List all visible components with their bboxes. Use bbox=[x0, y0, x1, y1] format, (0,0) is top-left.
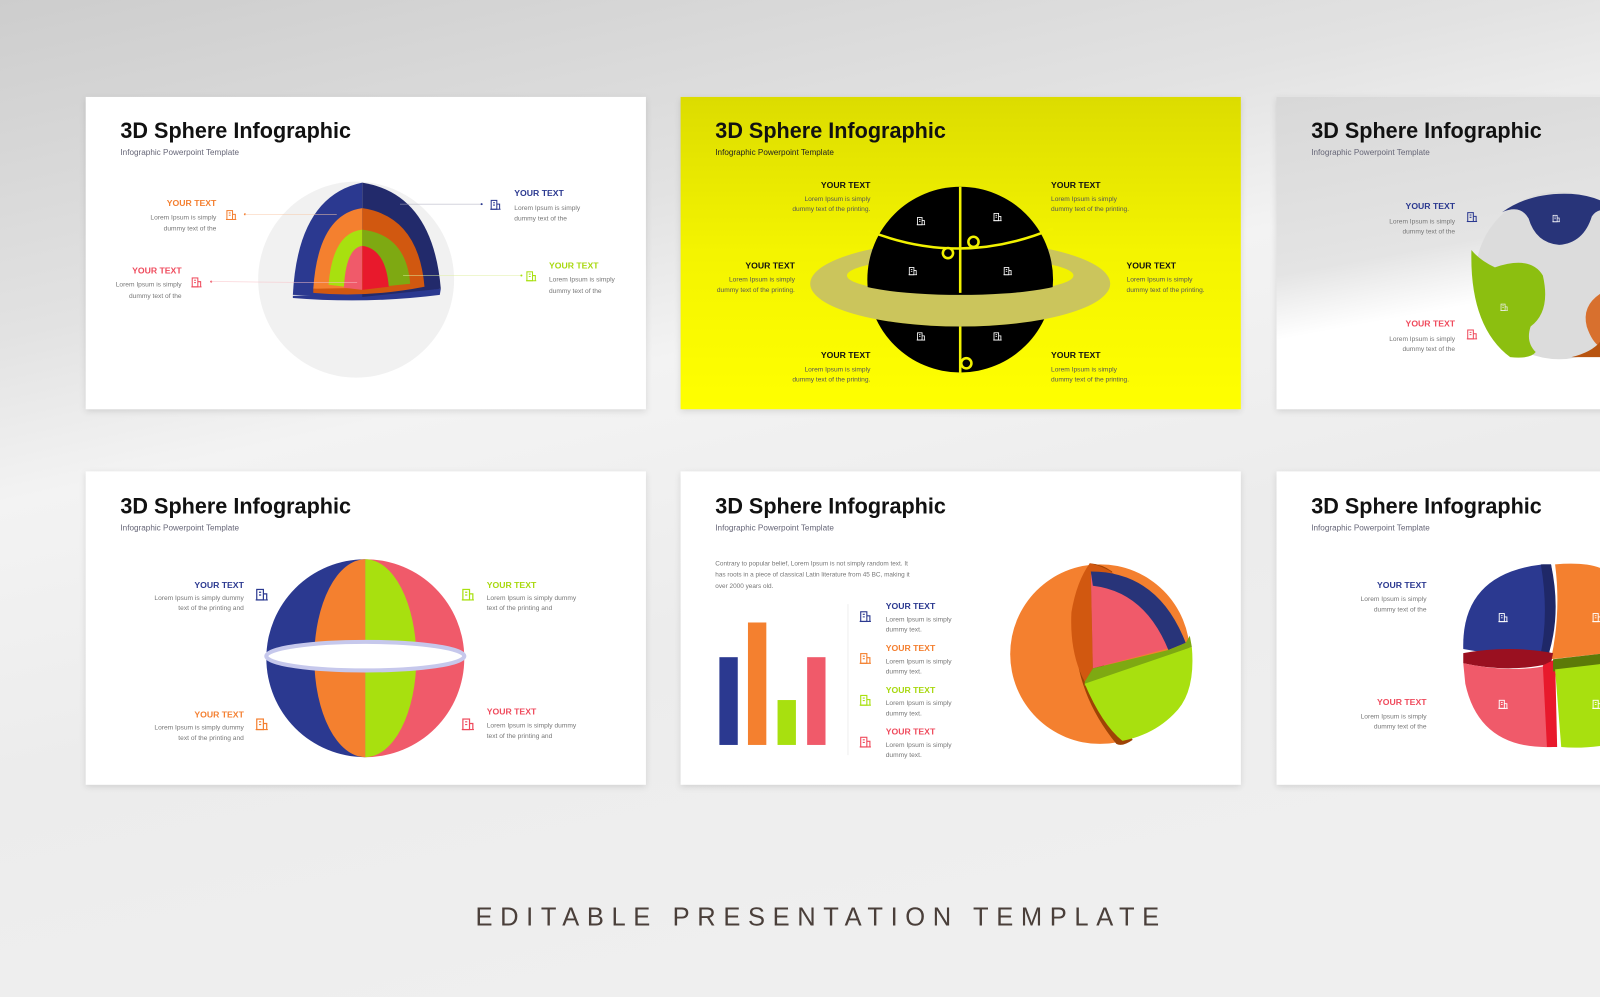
callout: blue bbox=[400, 188, 581, 222]
labels: left column: YOUR TEXT bbox=[745, 260, 796, 270]
callout: blue: text of the printing and bbox=[178, 605, 244, 612]
subtitle: Infographic Powerpoint Template bbox=[1311, 524, 1430, 533]
callout: orange: text of the printing and bbox=[178, 735, 244, 742]
paragraph bbox=[715, 560, 910, 590]
callout: orange: YOUR TEXT bbox=[194, 709, 245, 719]
striped sphere bbox=[266, 559, 464, 757]
legend list: YOUR TEXT bbox=[886, 643, 936, 653]
panel: bar chart and cut sphere bbox=[681, 471, 1241, 785]
callout: pink: YOUR TEXT bbox=[487, 706, 537, 716]
callout: orange: dummy text of the bbox=[164, 226, 217, 233]
labels: left column: dummy text of the printing. bbox=[717, 287, 795, 294]
callout: red: YOUR TEXT bbox=[132, 265, 182, 275]
paragraph: Contrary to popular belief, Lorem Ipsum is not simply random text. It bbox=[715, 560, 908, 567]
paragraph: has roots in a piece of classical Latin literature from 45 BC, making it bbox=[715, 572, 910, 579]
callout: blue: Lorem Ipsum is simply bbox=[1361, 596, 1427, 603]
callout: blue bbox=[154, 580, 268, 612]
callout: red bbox=[1389, 319, 1477, 353]
panel: striped sphere with ring bbox=[86, 471, 646, 785]
callout: green: text of the printing and bbox=[487, 605, 553, 612]
labels: left column: Lorem Ipsum is simply bbox=[729, 277, 796, 284]
labels: right column: Lorem Ipsum is simply bbox=[1051, 196, 1118, 203]
labels: left column: YOUR TEXT bbox=[821, 180, 871, 190]
legend list: Lorem Ipsum is simply bbox=[886, 742, 952, 749]
legend list: Lorem Ipsum is simply bbox=[886, 616, 952, 623]
title: 3D Sphere Infographic bbox=[1311, 118, 1542, 143]
callout: blue bbox=[1361, 580, 1427, 613]
legend list: YOUR TEXT bbox=[886, 601, 936, 611]
legend list: Lorem Ipsum is simply bbox=[886, 658, 952, 665]
dome chart bbox=[258, 182, 454, 378]
callout: blue: dummy text of the bbox=[514, 215, 567, 222]
callout: green: dummy text of the bbox=[549, 288, 602, 295]
puzzle sphere bbox=[1471, 192, 1600, 359]
callout: pink: text of the printing and bbox=[487, 733, 553, 740]
title: 3D Sphere Infographic bbox=[120, 118, 351, 143]
legend list: dummy text. bbox=[886, 710, 922, 717]
labels: right column: dummy text of the printing. bbox=[1051, 377, 1129, 384]
callout: blue: dummy text of the bbox=[1402, 229, 1455, 236]
callout: blue: dummy text of the bbox=[1374, 606, 1427, 613]
callout: red: YOUR TEXT bbox=[1377, 697, 1427, 707]
subtitle: Infographic Powerpoint Template bbox=[120, 524, 240, 533]
callout: red: Lorem Ipsum is simply bbox=[1389, 336, 1456, 343]
callout: pink bbox=[462, 706, 577, 740]
labels: right column: Lorem Ipsum is simply bbox=[1127, 277, 1193, 284]
labels: right column bbox=[1051, 180, 1205, 384]
callout: blue bbox=[1389, 201, 1477, 236]
callout: green bbox=[462, 580, 577, 612]
footer caption: EDITABLE PRESENTATION TEMPLATE bbox=[476, 904, 1159, 932]
legend list: YOUR TEXT bbox=[886, 685, 936, 695]
callout: pink: Lorem Ipsum is simply dummy bbox=[487, 723, 577, 730]
subtitle: Infographic Powerpoint Template bbox=[715, 524, 834, 533]
callout: orange bbox=[150, 198, 337, 233]
callout: red: Lorem Ipsum is simply bbox=[116, 282, 182, 289]
panel: layered dome bbox=[86, 97, 646, 409]
legend list: dummy text. bbox=[886, 627, 922, 634]
callout: red: dummy text of the bbox=[129, 293, 182, 300]
labels: right column: Lorem Ipsum is simply bbox=[1051, 366, 1118, 373]
legend list bbox=[860, 601, 952, 759]
callout: orange bbox=[154, 709, 268, 742]
labels: left column: YOUR TEXT bbox=[821, 350, 871, 360]
cut sphere bbox=[1010, 563, 1192, 745]
callout: red: Lorem Ipsum is simply bbox=[1361, 713, 1427, 720]
callout: green bbox=[403, 260, 616, 295]
quartered sphere bbox=[1463, 564, 1600, 748]
callout: red: dummy text of the bbox=[1374, 724, 1427, 731]
callout: green: Lorem Ipsum is simply bbox=[549, 277, 616, 284]
legend list: dummy text. bbox=[886, 669, 922, 676]
callout: blue: YOUR TEXT bbox=[1377, 580, 1427, 590]
panel: grey puzzle sphere (partial) bbox=[1277, 97, 1600, 409]
callout: blue: YOUR TEXT bbox=[194, 580, 245, 590]
callout: green: YOUR TEXT bbox=[487, 580, 537, 590]
callout: blue: YOUR TEXT bbox=[514, 188, 565, 198]
labels: left column: dummy text of the printing. bbox=[792, 377, 871, 384]
title: 3D Sphere Infographic bbox=[715, 118, 946, 143]
title: 3D Sphere Infographic bbox=[1311, 493, 1542, 518]
callout: red bbox=[116, 265, 357, 300]
callout: blue: Lorem Ipsum is simply bbox=[514, 205, 581, 212]
labels: right column: YOUR TEXT bbox=[1051, 350, 1101, 360]
legend list: Lorem Ipsum is simply bbox=[886, 700, 952, 707]
callout: green: Lorem Ipsum is simply dummy bbox=[487, 595, 577, 602]
labels: right column: dummy text of the printing. bbox=[1127, 287, 1205, 294]
labels: right column: YOUR TEXT bbox=[1127, 260, 1177, 270]
legend list: YOUR TEXT bbox=[886, 727, 936, 737]
callout: red bbox=[1361, 697, 1427, 731]
labels: left column: Lorem Ipsum is simply bbox=[805, 196, 871, 203]
legend list: dummy text. bbox=[886, 752, 922, 759]
panel: yellow saturn bbox=[681, 97, 1241, 409]
labels: right column: dummy text of the printing. bbox=[1051, 206, 1129, 213]
labels: left column: dummy text of the printing. bbox=[792, 206, 871, 213]
callout: blue: Lorem Ipsum is simply dummy bbox=[154, 595, 245, 602]
callout: red: YOUR TEXT bbox=[1406, 319, 1456, 329]
title: 3D Sphere Infographic bbox=[715, 493, 946, 518]
subtitle: Infographic Powerpoint Template bbox=[1311, 148, 1430, 157]
callout: green: YOUR TEXT bbox=[549, 260, 599, 270]
callout: red: dummy text of the bbox=[1402, 346, 1455, 353]
title: 3D Sphere Infographic bbox=[120, 493, 351, 518]
saturn sphere bbox=[810, 187, 1110, 373]
subtitle: Infographic Powerpoint Template bbox=[120, 148, 240, 157]
labels: left column: Lorem Ipsum is simply bbox=[805, 366, 871, 373]
panel: quartered sphere (partial) bbox=[1277, 471, 1600, 785]
bar chart bbox=[719, 622, 826, 745]
paragraph: over 2000 years old. bbox=[715, 583, 774, 590]
labels: left column bbox=[717, 180, 871, 384]
callout: orange: YOUR TEXT bbox=[167, 198, 217, 208]
callout: orange: Lorem Ipsum is simply bbox=[150, 214, 217, 221]
subtitle: Infographic Powerpoint Template bbox=[715, 148, 834, 157]
labels: right column: YOUR TEXT bbox=[1051, 180, 1101, 190]
callout: orange: Lorem Ipsum is simply dummy bbox=[154, 725, 245, 732]
callout: blue: Lorem Ipsum is simply bbox=[1389, 218, 1456, 225]
callout: blue: YOUR TEXT bbox=[1406, 201, 1456, 211]
